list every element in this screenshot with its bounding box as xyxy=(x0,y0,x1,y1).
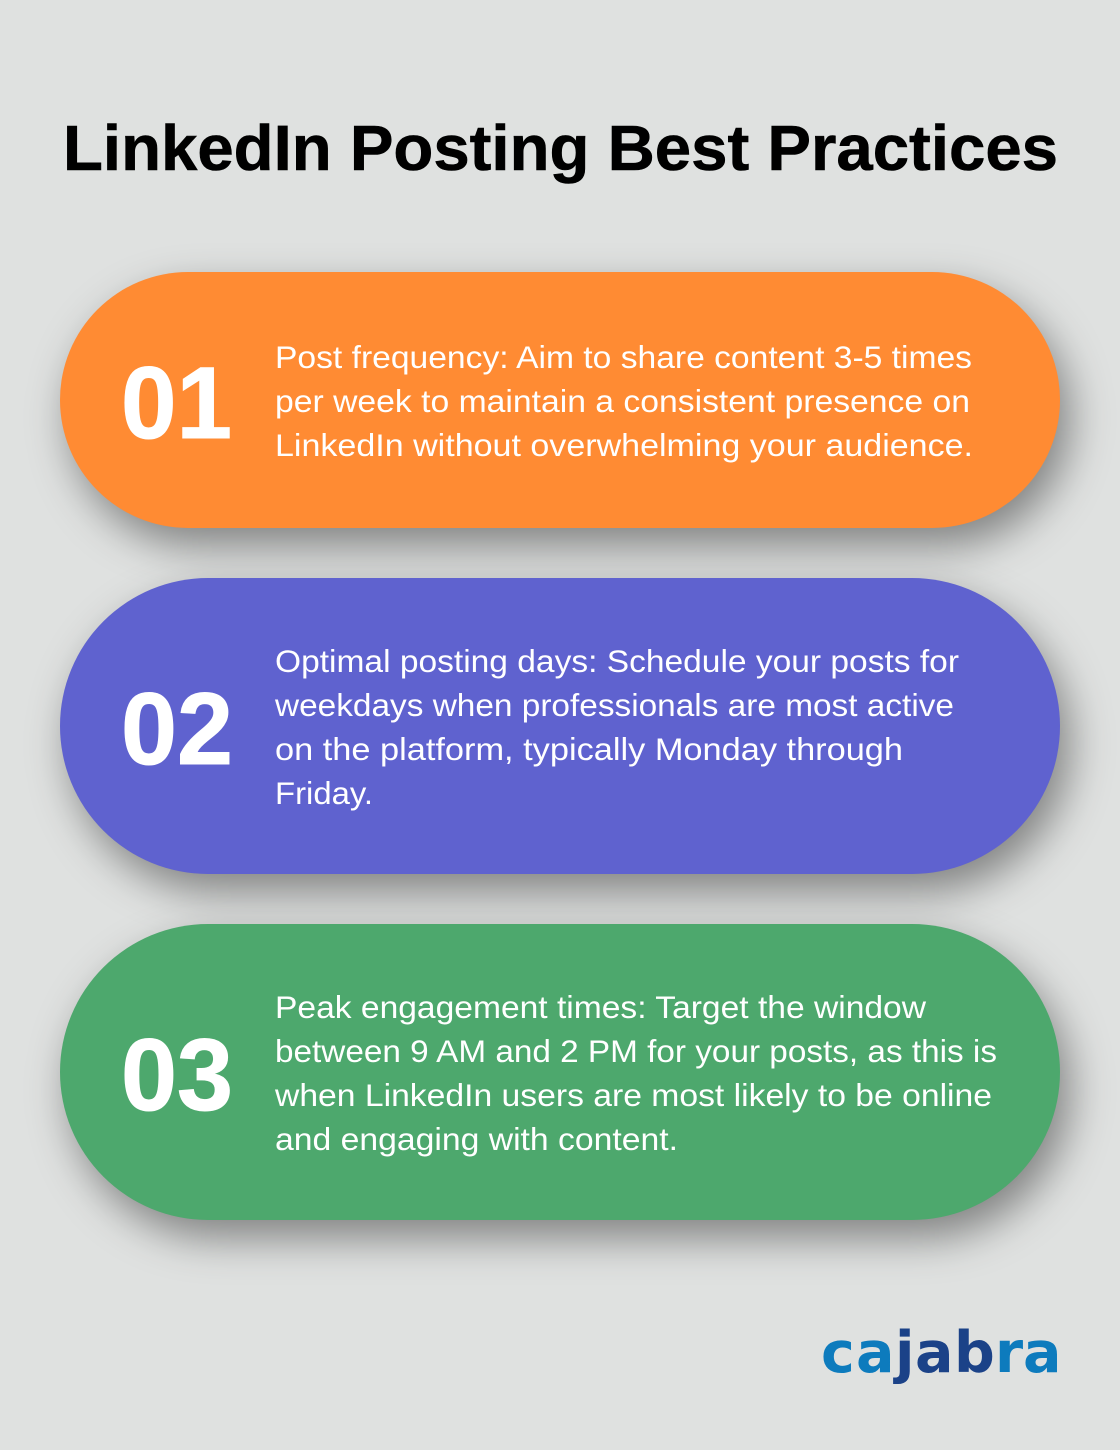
text block: peak engagement times: between 9 AM and 2 PM for your posts, as this is xyxy=(275,1033,997,1069)
panel: step 01 post frequency xyxy=(60,272,1070,546)
number 01: 01 xyxy=(121,346,232,460)
number 02: 02 xyxy=(121,672,233,786)
text block: optimal posting days: on the platform, typically Monday through xyxy=(275,731,903,767)
panel: step 03 peak engagement times xyxy=(60,924,1070,1238)
logo: cajabra: ra xyxy=(995,1320,1061,1386)
text block: peak engagement times: when LinkedIn users are most likely to be online xyxy=(274,1077,992,1113)
panel: step 02 optimal posting days xyxy=(60,578,1070,892)
pill background green xyxy=(60,924,1060,1220)
text block: optimal posting days: weekdays when professionals are most active xyxy=(274,687,954,723)
pill background purple xyxy=(60,578,1060,874)
pill background orange xyxy=(60,272,1060,528)
logo: cajabra: jab xyxy=(893,1320,995,1386)
text block: post frequency xyxy=(275,339,973,463)
text block: optimal posting days: Optimal posting days: Schedule your posts for xyxy=(275,643,959,679)
text block: optimal posting days: Friday. xyxy=(275,775,373,811)
text block: post frequency: LinkedIn without overwhelming your audience. xyxy=(275,427,973,463)
text block: post frequency: per week to maintain a consistent presence on xyxy=(275,383,970,419)
title: LinkedIn Posting Best Practices xyxy=(63,112,1058,184)
text block: peak engagement times: Peak engagement times: Target the window xyxy=(275,989,926,1025)
text block: optimal posting days xyxy=(274,643,959,811)
text block: peak engagement times xyxy=(274,989,997,1157)
text block: peak engagement times: and engaging with content. xyxy=(275,1121,678,1157)
text block: post frequency: Post frequency: Aim to share content 3-5 times xyxy=(275,339,972,375)
logo: cajabra: ca xyxy=(821,1320,894,1386)
number 03: 03 xyxy=(121,1018,233,1132)
